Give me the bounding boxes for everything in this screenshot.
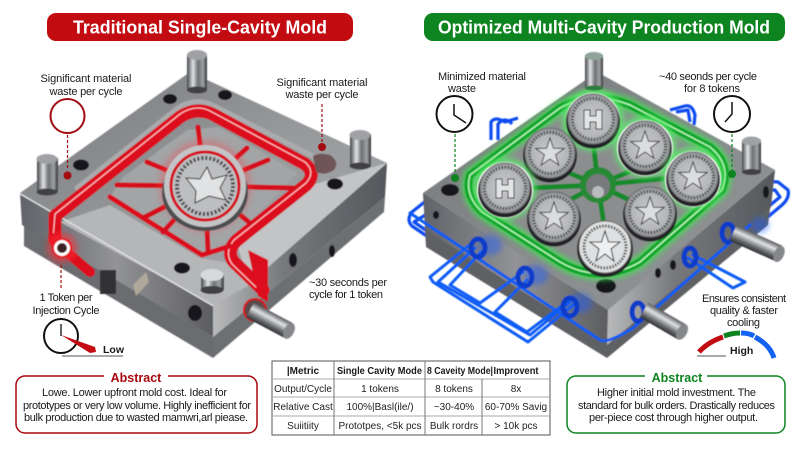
table: metric comparison	[272, 361, 550, 435]
callout: cooling	[702, 293, 786, 329]
table: metric comparison: 8x	[511, 384, 521, 395]
callout: material waste right	[276, 77, 368, 151]
panel: abstract multi cavity	[567, 370, 785, 433]
callout: material waste left: Significant material	[40, 73, 132, 85]
guide posts	[36, 50, 371, 341]
table: metric comparison: Prototpes, <5k pcs	[338, 421, 422, 432]
table: metric comparison: 8 Caveity Mode|	[427, 366, 493, 377]
inner plate	[110, 127, 297, 253]
blue cooling pipes front	[410, 213, 750, 342]
guide posts	[585, 52, 761, 175]
inner plate	[468, 98, 725, 273]
green runner loop	[468, 98, 725, 273]
panel: abstract multi cavity: standard for bulk orders. Drastically reduces	[578, 400, 776, 412]
blue glow on side face	[478, 217, 769, 313]
callout: material waste left: waste per cycle	[48, 86, 122, 98]
table: metric comparison: 1 tokens	[361, 384, 399, 395]
mold body faces	[20, 72, 387, 358]
table: metric comparison: Suiitiity	[287, 421, 319, 432]
table: metric comparison: 100%|Basl(ile/)	[346, 402, 414, 413]
callout: cycle time multi: ~40 seonds per cycle	[659, 71, 757, 83]
red runner loop notch	[313, 154, 336, 174]
icon: clock left	[436, 96, 472, 132]
callout: cooling: quality & faster	[710, 305, 778, 317]
callout: cycle time multi	[659, 71, 757, 178]
table: metric comparison: |Metric	[287, 366, 320, 377]
panel: abstract single cavity: Lowe. Lower upfront mold cost. Ideal for	[42, 387, 227, 399]
callout: cooling: cooling	[727, 317, 760, 329]
table: metric comparison: > 10k pcs	[494, 421, 538, 432]
injection point	[47, 233, 77, 263]
callout: 1 token per injection cycle: Low	[103, 344, 125, 356]
token star 7	[623, 187, 677, 242]
gauge: high: High	[730, 345, 753, 357]
callout: material waste left	[40, 73, 132, 180]
token star 2	[523, 128, 577, 182]
panel: abstract single cavity: prototypes or very low volume. Highly inefficient for	[23, 400, 251, 412]
icon: clock right	[714, 96, 750, 132]
table: metric comparison: Single Cavity Mode	[337, 366, 422, 377]
callout: 1 token per injection cycle: 1 Token per	[40, 292, 93, 304]
token star 5	[662, 147, 724, 209]
callout: minimized material waste: waste	[447, 83, 476, 95]
callout: 1 token per injection cycle	[32, 265, 125, 356]
callout: material waste right: waste per cycle	[284, 89, 358, 101]
mold holes	[433, 184, 769, 293]
panel: abstract single cavity	[16, 370, 257, 433]
callout: cycle time single	[309, 277, 387, 301]
illustration: multi-cavity mold	[409, 52, 788, 358]
token star 3	[614, 116, 676, 178]
token star 6	[527, 192, 581, 246]
table: metric comparison: ~30-40%	[434, 402, 474, 413]
callout: cooling: Ensures consistent	[702, 293, 786, 305]
title: traditional single-cavity mold	[47, 13, 353, 41]
side rods	[640, 225, 787, 342]
center star token	[159, 140, 251, 232]
central sprue	[580, 167, 616, 203]
panel: abstract multi cavity: Higher initial mold investment. The	[597, 387, 756, 399]
callout: cycle time multi: for 8 tokens	[684, 83, 740, 95]
callout: cycle time single: cycle for 1 token	[309, 289, 383, 301]
title: traditional single-cavity mold: Traditional Single-Cavity Mold	[73, 18, 327, 38]
table: metric comparison: Improvent	[494, 366, 539, 377]
table: metric comparison: 60-70% Savig	[485, 402, 547, 413]
callout: 1 token per injection cycle: Injection Cycle	[32, 305, 100, 317]
blue cooling loops behind	[409, 106, 788, 245]
callout: minimized material waste	[438, 71, 526, 182]
token H left	[474, 158, 536, 220]
callout: cycle time single: ~30 seconds per	[309, 277, 387, 289]
table: metric comparison: Output/Cycle	[274, 384, 332, 395]
callout: minimized material waste: Minimized material	[438, 71, 526, 83]
title: optimized multi-cavity production mold	[424, 13, 785, 41]
token star 8	[577, 221, 633, 277]
red runner frame	[53, 102, 313, 302]
title: optimized multi-cavity production mold: Optimized Multi-Cavity Production Mold	[438, 18, 770, 38]
table: metric comparison: 8 tokens	[435, 384, 473, 395]
illustration: single-cavity mold	[20, 50, 387, 358]
panel: abstract multi cavity: per-piece cost through higher output.	[589, 412, 758, 424]
tokens	[474, 89, 724, 277]
mold holes	[73, 90, 343, 321]
table: metric comparison: Bulk rordrs	[430, 421, 478, 432]
table: metric comparison: Relative Cast	[273, 402, 333, 413]
blue pipe ports	[471, 224, 734, 321]
token H top	[562, 89, 624, 151]
panel: abstract single cavity: bulk production due to wasted mamwri,arl piease.	[24, 412, 248, 424]
panel: abstract single cavity: Abstract	[111, 371, 162, 385]
panel: abstract multi cavity: Abstract	[652, 371, 703, 385]
callout: material waste right: Significant material	[276, 77, 368, 89]
mold body faces	[423, 72, 775, 358]
gauge: high	[697, 333, 774, 358]
